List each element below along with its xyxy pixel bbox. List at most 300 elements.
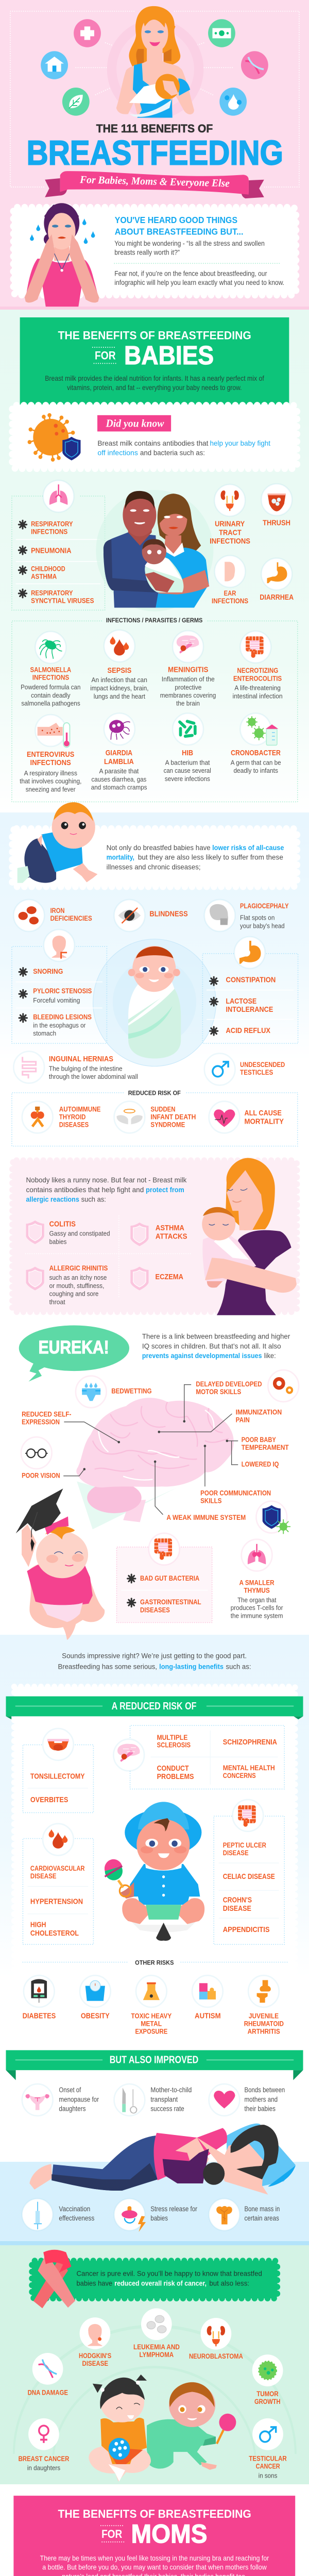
box: reduced risk of bbox=[12, 1090, 298, 1146]
item: sepsis: lungs and the heart bbox=[94, 693, 146, 700]
label: communication bbox=[200, 1489, 271, 1505]
item: salmonella: SALMONELLA bbox=[30, 666, 72, 674]
item: juvenile rheumatoid arthritis: JUVENILE bbox=[249, 2012, 279, 2020]
item: hodgkin's disease bbox=[79, 2317, 111, 2367]
item: bedwetting bbox=[76, 1376, 152, 1408]
box: reduced risk of: REDUCED RISK OF bbox=[128, 1090, 181, 1096]
item: salmonella: salmonella pathogens bbox=[21, 700, 80, 707]
item: bonds: Bonds between bbox=[244, 2086, 285, 2094]
icon: DNA bbox=[241, 51, 268, 79]
header: benefits for moms: FOR bbox=[101, 2528, 122, 2540]
item: leukemia and lymphoma: LYMPHOMA bbox=[140, 2351, 174, 2359]
item: thyroid diseases: THYROID bbox=[59, 1113, 85, 1121]
item: meningitis bbox=[160, 631, 216, 707]
long lasting benefits section bbox=[6, 1651, 303, 1978]
ribbon subtitle bbox=[45, 171, 264, 198]
list: cardiovascular: CARDIOVASCULAR bbox=[30, 1865, 85, 1872]
item: colitis: Gassy and constipated bbox=[49, 1230, 110, 1238]
list: oral: TONSILLECTOMY bbox=[30, 1772, 85, 1781]
illustration: baby with hat and rattle bbox=[105, 1802, 204, 1941]
list: mental bbox=[113, 1725, 284, 1789]
item: toxic heavy metal exposure: METAL bbox=[141, 2020, 162, 2027]
item: inguinal hernias bbox=[13, 1052, 138, 1083]
icon: house bbox=[41, 51, 68, 79]
header: benefits for moms: MOMS bbox=[131, 2519, 208, 2549]
item: colitis bbox=[26, 1220, 110, 1245]
item: autism: AUTISM bbox=[195, 2012, 221, 2021]
list: digestive risks left: SNORING bbox=[33, 968, 63, 975]
item: cronobacter: deadly to infants bbox=[233, 767, 278, 774]
item: hib bbox=[164, 713, 211, 783]
intro text: Fear not, if you’re on the fence about breastfeeding, our bbox=[114, 269, 267, 277]
heading: other risks: OTHER RISKS bbox=[135, 1960, 174, 1967]
item: hib: A bacterium that bbox=[165, 759, 210, 766]
icon: mouth bbox=[43, 1728, 74, 1760]
item: sepsis: An infection that can bbox=[92, 676, 147, 684]
icon: brain bbox=[113, 1739, 144, 1771]
label: immunization pain: PAIN bbox=[236, 1416, 250, 1423]
intro heading bbox=[115, 215, 244, 237]
item: smaller thymus: the immune system bbox=[231, 1613, 283, 1620]
item: asthma attacks bbox=[130, 1223, 187, 1246]
text block: allergic reactions bbox=[26, 1195, 79, 1204]
text block: but they are also less likely to suffer from these bbox=[138, 853, 283, 861]
item: urinary tract infections: INFECTIONS bbox=[210, 537, 250, 546]
text block: prevents against developmental issues bbox=[142, 1351, 262, 1360]
item: salmonella: Powdered formula can bbox=[21, 684, 81, 691]
label: immunization pain bbox=[236, 1408, 282, 1423]
list: digestive risks left: stomach bbox=[33, 1030, 56, 1037]
list: mental: SCHIZOPHRENIA bbox=[223, 1738, 277, 1747]
panel: did you know bbox=[12, 405, 297, 468]
list: mental: CONCERNS bbox=[223, 1772, 256, 1780]
label: temperament and IQ: LOWERED IQ bbox=[242, 1460, 279, 1468]
illustration: family bbox=[96, 490, 213, 612]
item: DNA damage: DNA DAMAGE bbox=[28, 2388, 68, 2396]
item: giardia lamblia: GIARDIA bbox=[106, 749, 132, 757]
item: juvenile rheumatoid arthritis: ARTHRITIS bbox=[248, 2027, 280, 2035]
text block: There is a link between breastfeeding and higher bbox=[142, 1332, 290, 1341]
item: ear infections: EAR bbox=[224, 589, 236, 597]
item: enterovirus: ENTEROVIRUS bbox=[27, 751, 74, 759]
item: salmonella bbox=[21, 632, 81, 707]
item: all cause mortality: MORTALITY bbox=[244, 1117, 284, 1126]
illustration: graduate baby bbox=[16, 1488, 105, 1640]
list: respiratory illnesses: SYNCYTIAL VIRUSES bbox=[31, 597, 94, 604]
item: asthma attacks: ASTHMA bbox=[156, 1224, 184, 1232]
text block bbox=[97, 439, 270, 457]
item: menopause onset: menopause for bbox=[59, 2095, 99, 2103]
callout: cancer bbox=[32, 2250, 277, 2308]
text block: contains antibodies that help fight and bbox=[26, 1185, 144, 1194]
item: urinary tract infections bbox=[210, 484, 250, 546]
item: breast cancer in daughters: in daughters bbox=[27, 2465, 60, 2472]
list: digestive risks right: CONSTIPATION bbox=[226, 976, 276, 985]
item: tumor growth: TUMOR bbox=[256, 2390, 279, 2398]
item: cronobacter: CRONOBACTER bbox=[231, 749, 281, 757]
item: testicular cancer in sons: CANCER bbox=[256, 2462, 280, 2470]
list: digestive: DISEASE bbox=[223, 1849, 249, 1857]
label: temperament and IQ: POOR BABY bbox=[242, 1436, 276, 1444]
item: SIDS: INFANT DEATH bbox=[150, 1113, 196, 1121]
item: weak immune system bbox=[166, 1501, 290, 1534]
text block: and bacteria such as: bbox=[140, 449, 205, 457]
item: inguinal hernias: through the lower abdominal wall bbox=[49, 1073, 138, 1080]
text block: off infections bbox=[97, 449, 138, 457]
item: giardia lamblia: LAMBLIA bbox=[104, 758, 134, 766]
item: diarrhea: DIARRHEA bbox=[260, 594, 294, 602]
list: cardiovascular: HYPERTENSION bbox=[30, 1897, 83, 1906]
item: meningitis: membranes covering bbox=[160, 692, 216, 699]
item: enterovirus: sneezing and fever bbox=[26, 786, 76, 793]
list: mental: CONDUCT bbox=[157, 1765, 189, 1773]
list: digestive: PEPTIC ULCER bbox=[223, 1841, 266, 1849]
icon: water drops bbox=[219, 88, 247, 116]
panel: all-cause mortality bbox=[12, 802, 297, 887]
item: undescended testicles bbox=[204, 1054, 285, 1085]
label: communication: POOR COMMUNICATION bbox=[200, 1489, 271, 1497]
cancer section bbox=[13, 2250, 297, 2576]
item: menopause onset: daughters bbox=[59, 2104, 85, 2113]
item: transplant success: Mother-to-child bbox=[150, 2086, 192, 2094]
list: digestive bbox=[214, 1800, 284, 1944]
banner: a reduced risk of bbox=[6, 1697, 303, 1719]
item: enterovirus: that involves coughing, bbox=[20, 778, 81, 785]
item: neuroblastoma: NEUROBLASTOMA bbox=[189, 2352, 243, 2360]
text block bbox=[107, 843, 284, 871]
item: diabetes bbox=[23, 1975, 56, 2021]
item: thyroid diseases bbox=[22, 1101, 101, 1133]
illustration: two babies bbox=[89, 2375, 236, 2481]
item: undescended testicles: UNDESCENDED bbox=[240, 1061, 285, 1069]
panel: reduced risk bbox=[6, 1687, 303, 1978]
item: smaller thymus bbox=[231, 1539, 283, 1620]
text block: mortality, bbox=[107, 853, 134, 861]
item: meningitis: Inflammation of the bbox=[162, 675, 215, 683]
item: undescended testicles: TESTICLES bbox=[240, 1069, 273, 1076]
item: iron deficiencies: IRON bbox=[50, 907, 65, 914]
banner: a reduced risk of: A REDUCED RISK OF bbox=[112, 1701, 197, 1712]
icon: blood bbox=[43, 1824, 74, 1855]
intro text: You might be wondering - “Is all the stress and swollen bbox=[114, 239, 265, 247]
text block: illnesses and chronic diseases; bbox=[107, 862, 201, 871]
item: hib: severe infections bbox=[165, 775, 210, 783]
intro heading: ABOUT BREASTFEEDING BUT... bbox=[115, 227, 244, 237]
list: cardiovascular: DISEASE bbox=[30, 1872, 57, 1880]
item: bonds: mothers and bbox=[244, 2095, 278, 2103]
list: digestive: CROHN'S bbox=[223, 1896, 252, 1904]
item: transplant success bbox=[114, 2084, 192, 2116]
box: gut bacteria: DISEASES bbox=[140, 1606, 170, 1614]
item: iron deficiencies: DEFICIENCIES bbox=[50, 914, 92, 922]
item: autism bbox=[192, 1975, 223, 2021]
label: did you know: Did you know bbox=[106, 418, 164, 429]
item: plagiocephaly: Flat spots on bbox=[240, 914, 274, 922]
speech bubble: eureka: EUREKA! bbox=[39, 1338, 109, 1358]
item: blindness: BLINDNESS bbox=[149, 910, 188, 919]
text block bbox=[26, 1176, 187, 1204]
panel: allergic reactions bbox=[12, 1158, 297, 1315]
item: necrotizing enterocolitis bbox=[233, 631, 283, 700]
item: leukemia and lymphoma: LEUKEMIA AND bbox=[133, 2343, 180, 2351]
label: communication: SKILLS bbox=[200, 1497, 222, 1505]
item: cronobacter bbox=[231, 713, 281, 774]
item: vaccination bbox=[22, 2199, 94, 2230]
list: oral: OVERBITES bbox=[30, 1796, 68, 1804]
list: respiratory illnesses: PNEUMONIA bbox=[31, 547, 72, 555]
header: benefits for babies: Breast milk provides the ideal nutrition for infants. It has a nearly perfect mix of bbox=[45, 374, 264, 382]
text block: IQ scores in children. But that’s not all. It also bbox=[142, 1342, 281, 1350]
list: mental: PROBLEMS bbox=[157, 1773, 194, 1781]
item: tumor growth bbox=[252, 2354, 283, 2405]
item: hib: HIB bbox=[182, 749, 193, 757]
item: tumor growth: GROWTH bbox=[254, 2398, 281, 2405]
item: hib: can cause several bbox=[164, 767, 211, 774]
header: benefits for moms bbox=[13, 2496, 295, 2576]
item: testicular cancer in sons: in sons bbox=[259, 2472, 277, 2480]
callouts: brain labels bbox=[21, 1370, 299, 1534]
intro text: long-lasting benefits bbox=[159, 1662, 224, 1671]
illustration: mom and sleeping baby bbox=[202, 1158, 297, 1315]
box: gut bacteria bbox=[117, 1533, 212, 1622]
eureka section bbox=[16, 1326, 299, 1640]
item: allergic rhinitis: such as an itchy nose bbox=[49, 1274, 107, 1281]
item: thyroid diseases: DISEASES bbox=[59, 1121, 89, 1128]
icon: cancer ribbon bbox=[33, 2250, 75, 2308]
intro heading: YOU'VE HEARD GOOD THINGS bbox=[115, 215, 237, 225]
list: digestive risks left bbox=[12, 929, 107, 1043]
banner: but also improved: BUT ALSO IMPROVED bbox=[110, 2054, 198, 2066]
callout: cancer: but also less: bbox=[209, 2279, 249, 2287]
list: mental: MULTIPLE bbox=[157, 1734, 187, 1741]
item: all cause mortality bbox=[209, 1101, 284, 1133]
icon: stomach bbox=[234, 937, 265, 969]
header: benefits for babies: THE BENEFITS OF BREASTFEEDING bbox=[58, 329, 251, 342]
decorative arcs bbox=[13, 2325, 297, 2455]
label: reduced self-expression bbox=[22, 1410, 72, 1426]
item: SIDS: SUDDEN bbox=[150, 1105, 176, 1113]
header: benefits for moms: There may be times when you feel like tossing in the nursing bra and reaching for bbox=[40, 2554, 269, 2562]
list: oral bbox=[23, 1728, 93, 1812]
list: digestive risks left: BLEEDING LESIONS bbox=[33, 1013, 92, 1021]
text block: Breast milk contains antibodies that bbox=[97, 439, 209, 447]
heading: infections parasites germs: INFECTIONS / PARASITES / GERMS bbox=[106, 617, 203, 624]
item: allergic rhinitis: ALLERGIC RHINITIS bbox=[49, 1264, 108, 1272]
item: allergic rhinitis: or mouth, stuffiness, bbox=[49, 1282, 104, 1290]
text block: like: bbox=[264, 1351, 276, 1360]
item: salmonella: INFECTIONS bbox=[32, 673, 69, 682]
illnesses section bbox=[12, 929, 298, 1315]
item: juvenile rheumatoid arthritis: RHEUMATOID bbox=[244, 2020, 284, 2027]
item: enterovirus bbox=[20, 715, 81, 793]
item: giardia lamblia bbox=[91, 713, 147, 791]
list: digestive: DISEASE bbox=[223, 1905, 251, 1913]
item: iron deficiencies bbox=[13, 900, 92, 931]
illustration: mom nursing lying down bbox=[29, 2124, 296, 2195]
item: obesity bbox=[80, 1975, 111, 2021]
callout: cancer: Cancer is pure evil. So you’ll be happy to know that breastfed bbox=[76, 2269, 262, 2278]
item: toxic heavy metal exposure: EXPOSURE bbox=[135, 2027, 167, 2035]
header: benefits for babies: vitamins, protein, and fat -- everything your baby needs to grow. bbox=[67, 383, 242, 392]
icon: money bbox=[208, 19, 235, 47]
item: enterovirus: INFECTIONS bbox=[30, 759, 71, 767]
illustration: worried mom bbox=[25, 203, 99, 307]
ribbon subtitle: For Babies, Moms & Everyone Else bbox=[79, 174, 230, 190]
box: gut bacteria: GASTROINTESTINAL bbox=[140, 1598, 201, 1606]
icon: leaf bbox=[62, 88, 90, 116]
item: plagiocephaly: PLAGIOCEPHALY bbox=[240, 902, 289, 910]
item: juvenile rheumatoid arthritis bbox=[244, 1975, 284, 2035]
list: respiratory illnesses bbox=[12, 480, 105, 610]
list: digestive risks left: Forceful vomiting bbox=[33, 997, 80, 1004]
item: urinary tract infections: TRACT bbox=[219, 529, 242, 537]
item: smaller thymus: The organ that bbox=[237, 1597, 277, 1604]
list: digestive risks right bbox=[202, 937, 298, 1043]
label: reduced self-expression: EXPRESSION bbox=[22, 1418, 60, 1426]
hero woman breastfeeding bbox=[107, 6, 203, 119]
item: eczema bbox=[130, 1267, 183, 1291]
illustration: swaddled baby bbox=[93, 939, 216, 1066]
item: necrotizing enterocolitis: A life-threatening bbox=[234, 684, 281, 692]
item: ear infections: INFECTIONS bbox=[212, 597, 248, 605]
item: allergic rhinitis bbox=[26, 1264, 108, 1306]
item: stress release bbox=[114, 2199, 197, 2232]
item: colitis: COLITIS bbox=[49, 1220, 76, 1228]
intro text: infographic will help you learn exactly what you need to know. bbox=[114, 278, 284, 286]
label: temperament and IQ: TEMPERAMENT bbox=[242, 1444, 289, 1451]
list: digestive risks left: in the esophagus or bbox=[33, 1022, 85, 1029]
item: blindness bbox=[114, 900, 188, 931]
item: giardia lamblia: and stomach cramps bbox=[91, 784, 147, 791]
item: delayed motor skills: DELAYED DEVELOPED bbox=[196, 1380, 262, 1388]
list: digestive: APPENDICITIS bbox=[223, 1926, 270, 1934]
list: mental: SCLEROSIS bbox=[157, 1741, 191, 1749]
list: digestive risks right: LACTOSE bbox=[226, 997, 256, 1006]
item: vaccination: Vaccination bbox=[59, 2205, 90, 2213]
item: necrotizing enterocolitis: NECROTIZING bbox=[237, 667, 278, 674]
item: diabetes: DIABETES bbox=[23, 2012, 56, 2021]
label: reduced self-expression: REDUCED SELF- bbox=[22, 1410, 72, 1418]
item: urinary tract infections: URINARY bbox=[215, 520, 245, 529]
list: digestive risks left: PYLORIC STENOSIS bbox=[33, 987, 92, 995]
text block: Nobody likes a runny nose. But fear not - Breast milk bbox=[26, 1176, 187, 1184]
item: all cause mortality: ALL CAUSE bbox=[244, 1109, 282, 1117]
list: respiratory illnesses: RESPIRATORY bbox=[31, 520, 73, 528]
item: poor vision bbox=[21, 1437, 60, 1480]
item: thyroid diseases: AUTOIMMUNE bbox=[59, 1105, 101, 1113]
item: testicular cancer in sons: TESTICULAR bbox=[249, 2454, 287, 2463]
item: ear infections bbox=[212, 555, 248, 605]
item: vaccination: effectiveness bbox=[59, 2214, 94, 2222]
text block: help your baby fight bbox=[210, 439, 270, 447]
item: sepsis: impact kidneys, brain, bbox=[90, 685, 149, 692]
item: inguinal hernias: The bulging of the intestine bbox=[49, 1065, 123, 1072]
intro text: Breastfeeding has some serious, bbox=[58, 1662, 157, 1671]
item: stress release: babies bbox=[150, 2214, 168, 2222]
banner: but also improved bbox=[6, 2050, 303, 2080]
text block: such as: bbox=[81, 1195, 106, 1204]
list: cardiovascular: CHOLESTEROL bbox=[30, 1929, 79, 1938]
item: breast cancer in daughters: BREAST CANCER bbox=[19, 2455, 70, 2463]
item: bone mass: Bone mass in bbox=[244, 2205, 280, 2213]
text block: protect from bbox=[146, 1185, 184, 1194]
item: giardia lamblia: A parasite that bbox=[99, 768, 139, 775]
item: toxic heavy metal exposure: TOXIC HEAVY bbox=[131, 2012, 171, 2020]
list: digestive: CELIAC DISEASE bbox=[223, 1873, 275, 1881]
label: did you know bbox=[97, 415, 171, 431]
icon: throat bbox=[44, 929, 75, 961]
item: SIDS bbox=[114, 1101, 196, 1133]
item: meningitis: MENINGITIS bbox=[168, 666, 209, 674]
icon: virus and shield bbox=[28, 413, 81, 462]
item: bonds: their babies bbox=[244, 2104, 276, 2113]
item: stress release: Stress release for bbox=[150, 2205, 197, 2213]
list: cardiovascular: HIGH bbox=[30, 1921, 46, 1929]
icon: intestine bbox=[149, 1533, 180, 1565]
item: eczema: ECZEMA bbox=[156, 1273, 183, 1281]
item: plagiocephaly bbox=[204, 900, 289, 931]
item: smaller thymus: produces T-cells for bbox=[231, 1604, 283, 1612]
item: colitis: babies bbox=[49, 1238, 66, 1245]
item: breast cancer in daughters bbox=[19, 2418, 70, 2472]
item: smaller thymus: A SMALLER bbox=[239, 1579, 274, 1586]
header: benefits for babies bbox=[20, 317, 289, 404]
item: testicular cancer in sons bbox=[249, 2418, 287, 2480]
text block: lower risks of all-cause bbox=[212, 843, 284, 852]
item: meningitis: the brain bbox=[176, 700, 200, 707]
item: enterovirus: A respiratory illness bbox=[24, 770, 77, 777]
item: delayed motor skills bbox=[196, 1370, 299, 1402]
item: SIDS: SYNDROME bbox=[150, 1121, 185, 1128]
item: inguinal hernias: INGUINAL HERNIAS bbox=[49, 1055, 113, 1063]
item: plagiocephaly: your baby's head bbox=[240, 922, 285, 930]
icon: lungs bbox=[43, 480, 74, 512]
item: salmonella: contain deadly bbox=[31, 692, 71, 699]
box: gut bacteria: BAD GUT BACTERIA bbox=[140, 1574, 200, 1582]
item: allergic rhinitis: throat bbox=[49, 1298, 65, 1306]
hero section bbox=[10, 6, 299, 307]
icon: medical plus bbox=[74, 19, 101, 47]
intro text bbox=[114, 239, 284, 286]
intro text: Sounds impressive right? We’re just getting to the good part. bbox=[62, 1651, 247, 1660]
list: respiratory illnesses: ASTHMA bbox=[31, 573, 57, 581]
icon: intestine bbox=[233, 1800, 263, 1832]
item: asthma attacks: ATTACKS bbox=[156, 1232, 187, 1241]
intro text: such as: bbox=[226, 1662, 251, 1671]
header: benefits for moms: a bottle. But before you do, you may want to consider that when mothers follow bbox=[42, 2563, 267, 2571]
label: immunization pain: IMMUNIZATION bbox=[236, 1408, 282, 1416]
label: temperament and IQ bbox=[242, 1436, 289, 1468]
item: hodgkin's disease: HODGKIN'S bbox=[79, 2352, 111, 2360]
item: DNA damage bbox=[28, 2353, 68, 2396]
item: necrotizing enterocolitis: intestinal infection bbox=[233, 692, 283, 700]
title: THE 111 BENEFITS OF bbox=[96, 122, 213, 135]
header: benefits for babies: BABIES bbox=[124, 340, 214, 370]
list: digestive risks right: INTOLERANCE bbox=[226, 1006, 273, 1014]
list: respiratory illnesses: RESPIRATORY bbox=[31, 589, 73, 597]
item: necrotizing enterocolitis: ENTEROCOLITIS bbox=[233, 674, 282, 683]
list: digestive risks right: ACID REFLUX bbox=[226, 1027, 270, 1035]
intro text: breasts really worth it?” bbox=[114, 248, 180, 257]
item: menopause onset: Onset of bbox=[59, 2086, 81, 2094]
illustration: crawling baby bbox=[18, 802, 97, 883]
item: menopause onset bbox=[22, 2084, 99, 2116]
other risks and improvements bbox=[6, 1960, 303, 2232]
item: allergic rhinitis: coughing and sore bbox=[49, 1290, 98, 1298]
list: respiratory illnesses: CHILDHOOD bbox=[31, 565, 65, 573]
panel: intro worried mom bbox=[12, 203, 298, 307]
intro text bbox=[58, 1651, 251, 1671]
